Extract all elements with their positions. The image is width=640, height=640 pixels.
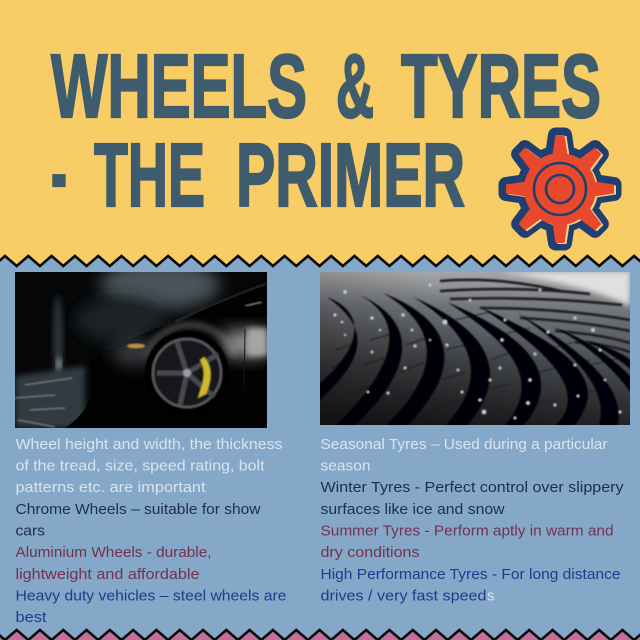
title: WHEELS [51, 37, 307, 137]
text block: wheels [16, 436, 286, 626]
title [51, 37, 601, 226]
text block: tyres: Seasonal Tyres – Used during a particular [320, 436, 608, 453]
tread texture [332, 311, 618, 392]
car wheel [145, 331, 229, 415]
text block: tyres: Summer Tyres - Perform aptly in warm and [320, 523, 614, 540]
title: THE [94, 126, 205, 226]
photo: wet tyre tread [318, 272, 634, 428]
text block: tyres: drives / very fast speed [320, 588, 486, 605]
text block: wheels: cars [16, 523, 45, 540]
text block: wheels: best [16, 609, 47, 626]
text block: tyres: s [487, 588, 494, 605]
photo: black sports car [15, 260, 267, 428]
text block: tyres: dry conditions [320, 544, 420, 561]
text block: wheels: Chrome Wheels – suitable for show [16, 501, 261, 518]
tyre grooves [318, 293, 634, 428]
icon: gear [506, 135, 616, 244]
title: & [336, 37, 374, 137]
water droplets [333, 283, 622, 420]
text block: wheels: of the tread, size, speed rating, bolt [16, 458, 265, 474]
text block: tyres: season [320, 458, 370, 474]
top zigzag border [0, 256, 640, 266]
bottom zigzag border [0, 630, 640, 640]
text block: wheels: Heavy duty vehicles – steel wheels are [16, 588, 286, 605]
text block: wheels: lightweight and affordable [16, 566, 200, 583]
text block: wheels: Wheel height and width, the thickness [16, 436, 282, 453]
title: PRIMER [236, 126, 465, 226]
text block: tyres: surfaces like ice and snow [320, 501, 505, 518]
text block: wheels: patterns etc. are important [16, 479, 206, 496]
header band [0, 0, 640, 256]
title: - [51, 124, 67, 224]
text block: wheels: Aluminium Wheels - durable, [16, 544, 211, 561]
text block: tyres: High Performance Tyres - For long distance [320, 566, 620, 583]
text block: tyres: Winter Tyres - Perfect control over slippery [320, 479, 624, 496]
text block: tyres [320, 436, 624, 605]
